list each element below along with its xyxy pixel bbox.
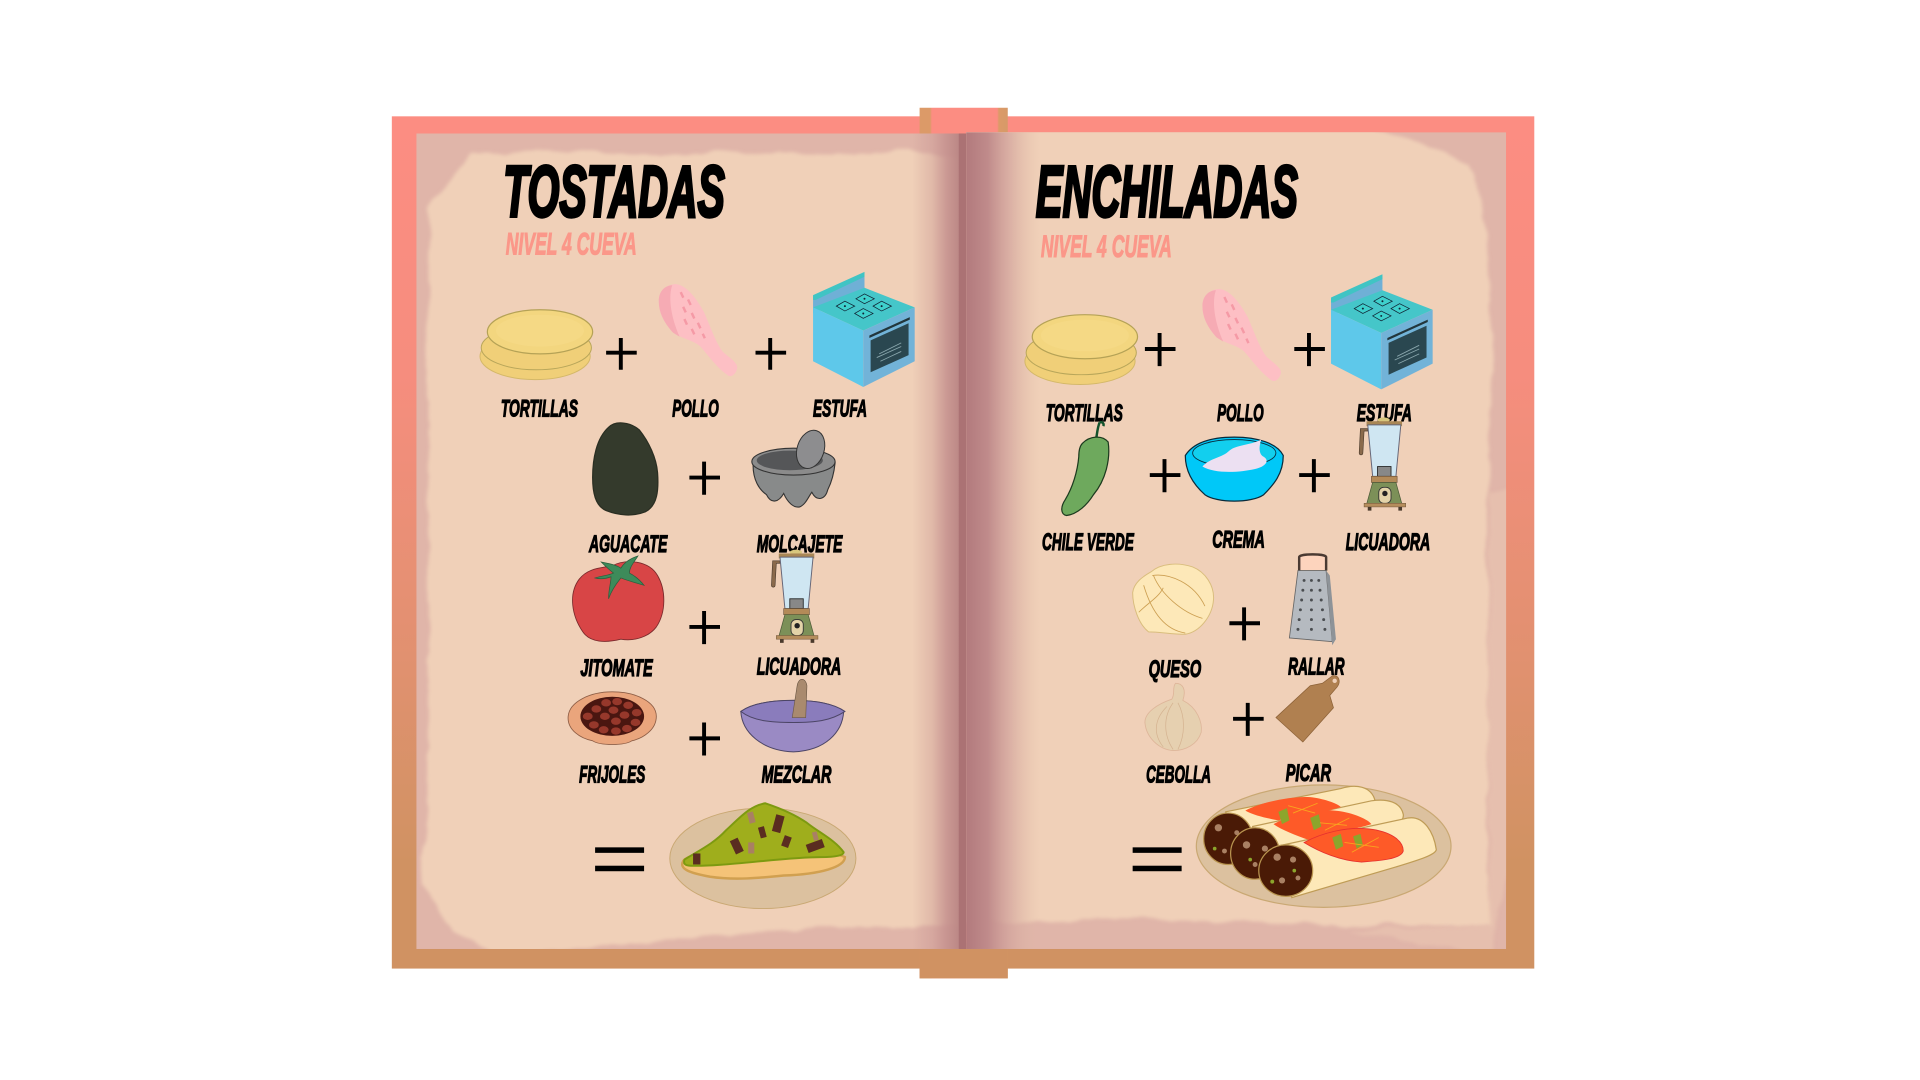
title: enchiladas: ENCHILADAS [1036,153,1298,233]
labels: tostadas ingredients [501,395,867,788]
labels: enchiladas ingredients [1042,400,1430,788]
icon: rallar [1289,554,1336,645]
subtitle: right level: NIVEL 4 CUEVA [1041,228,1172,264]
icon: molcajete [752,427,835,507]
icon: aguacate [593,423,658,515]
icon: tortillas left [480,310,593,380]
labels: tostadas ingredients: AGUACATE [588,531,668,558]
labels: tostadas ingredients: JITOMATE [580,655,653,682]
labels: enchiladas ingredients: PICAR [1286,760,1331,787]
icon: estufa right [1331,274,1433,389]
spine tab [920,108,1008,978]
labels: enchiladas ingredients: CEBOLLA [1146,761,1211,788]
equals sign: tostadas [595,847,644,871]
labels: tostadas ingredients: FRIJOLES [579,761,646,788]
icon: mezclar [741,679,845,752]
icon: licuadora left [771,550,818,643]
labels: enchiladas ingredients: ESTUFA [1357,400,1412,427]
labels: enchiladas ingredients: CHILE VERDE [1042,529,1134,556]
labels: enchiladas ingredients: CREMA [1212,526,1265,553]
labels: enchiladas ingredients: LICUADORA [1346,529,1430,556]
labels: enchiladas ingredients: TORTILLAS [1046,400,1123,427]
icon: chile verde [1062,422,1109,516]
icon: pollo left [659,284,737,376]
plus signs: tostadas [606,338,786,756]
labels: enchiladas ingredients: POLLO [1217,400,1264,427]
subtitle: left level: NIVEL 4 CUEVA [506,226,637,262]
equals sign: enchiladas [1133,847,1182,871]
labels: enchiladas ingredients: QUESO [1149,656,1201,683]
panel: right page [943,122,1512,955]
icon: licuadora right [1359,418,1406,511]
icon: cebolla [1145,683,1201,751]
icon: estufa left [813,272,915,387]
icon: queso [1133,564,1214,634]
panel: left page [416,133,967,953]
labels: tostadas ingredients: MOLCAJETE [757,531,843,558]
icon: jitomate [573,556,664,641]
spine tab bottom [920,943,1008,978]
book cover [392,116,1534,969]
title: tostadas: TOSTADAS [503,153,725,233]
infographic: recipe book [392,108,1534,978]
labels: tostadas ingredients: ESTUFA [813,395,867,422]
plus signs: enchiladas [1145,333,1330,736]
labels: tostadas ingredients: LICUADORA [757,654,841,681]
icon: frijoles [568,692,656,744]
icon: enchiladas plate [1196,785,1451,907]
icon: crema [1185,437,1283,501]
labels: tostadas ingredients: POLLO [672,395,719,422]
labels: enchiladas ingredients: RALLAR [1288,654,1345,681]
icon: pollo right [1202,289,1281,381]
labels: tostadas ingredients: MEZCLAR [762,761,832,788]
icon: tortillas right [1025,315,1138,384]
icon: tostada plate [670,803,856,909]
labels: tostadas ingredients: TORTILLAS [501,395,578,422]
spine [959,133,966,949]
icon: picar [1276,676,1339,742]
